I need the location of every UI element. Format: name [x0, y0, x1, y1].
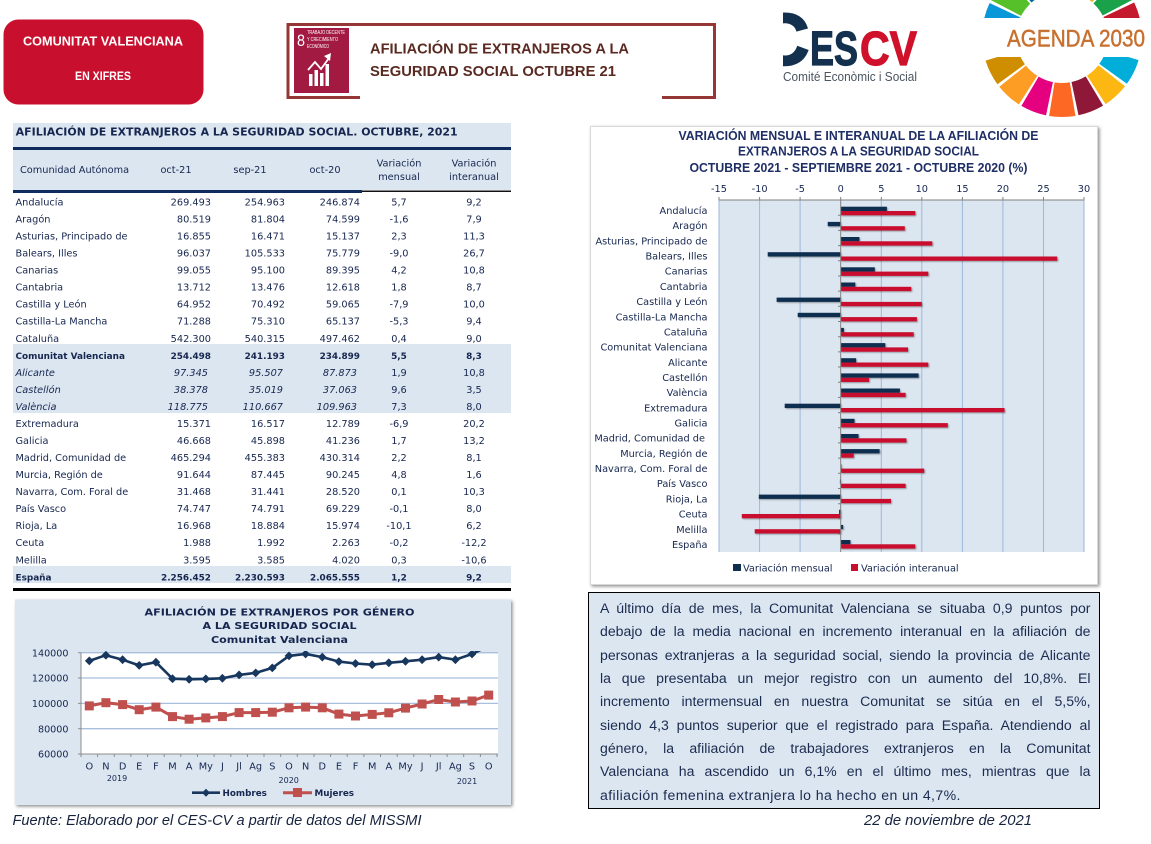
table rows: -7,9 — [389, 300, 409, 311]
heading — [370, 40, 629, 80]
axis values — [711, 184, 1090, 195]
table rows: 46.668 — [177, 436, 211, 447]
axis values: 0 — [838, 184, 844, 195]
table rows: 31.468 — [177, 487, 211, 498]
category labels: País Vasco — [657, 478, 708, 490]
table rows: 74.791 — [251, 504, 285, 515]
table rows: 2.256.452 — [161, 573, 211, 583]
category labels: Castellón — [662, 372, 708, 384]
table rows: 75.310 — [251, 317, 285, 328]
y axis labels — [32, 648, 68, 761]
table rows: 0,3 — [391, 555, 407, 566]
axis values: -15 — [711, 184, 727, 195]
table rows: Extremadura — [16, 419, 79, 430]
table header: oct-21 — [160, 165, 192, 176]
table rows: -12,2 — [461, 538, 487, 549]
title box — [288, 24, 714, 98]
table rows: 241.193 — [245, 352, 285, 362]
table rows: 1.992 — [257, 538, 285, 549]
table rows: 12.789 — [326, 419, 360, 430]
table rows: 0,4 — [391, 334, 407, 345]
table rows: 69.229 — [326, 504, 360, 515]
table rows: Madrid, Comunidad de — [16, 453, 126, 464]
logo: CES CV: Comité Econòmic i Social — [783, 70, 917, 84]
table header: Variación — [377, 158, 421, 170]
table rows: Canarias — [16, 266, 58, 277]
series: Mujeres — [89, 695, 489, 719]
table rows: -9,0 — [389, 249, 409, 260]
y axis labels: 140000 — [32, 648, 68, 659]
table rows — [14, 196, 487, 583]
table rows: 9,2 — [466, 573, 482, 583]
line chart legend: Hombres — [222, 789, 267, 799]
icon: SDG 8 — [294, 28, 349, 93]
line chart plot — [32, 646, 498, 786]
table rows: Andalucía — [16, 196, 63, 208]
x axis labels: O — [485, 762, 493, 772]
category labels: Galicia — [674, 418, 708, 430]
category labels: Melilla — [676, 525, 708, 536]
x axis labels: F — [153, 762, 159, 772]
logo: Agenda 2030 wheel — [984, 0, 1144, 117]
panel: line chart — [15, 600, 511, 805]
table rows: 13.476 — [251, 283, 285, 294]
bar chart legend: Variación mensual — [743, 562, 833, 574]
x axis labels: J — [420, 762, 424, 772]
category labels: València — [667, 387, 708, 399]
table rows: 8,0 — [466, 402, 482, 413]
table rows: 269.493 — [171, 198, 211, 208]
table rows: -0,2 — [389, 538, 409, 549]
x axis labels: My — [398, 762, 413, 772]
y axis labels: 100000 — [32, 699, 68, 710]
axis values: 5 — [878, 184, 884, 195]
table rows: País Vasco — [16, 503, 66, 515]
logo: CES CV: C — [757, 0, 809, 80]
table rows: 9,6 — [391, 385, 407, 396]
table rows: 9,4 — [466, 317, 482, 328]
table title: AFILIACIÓN DE EXTRANJEROS A LA SEGURIDAD SOCIAL. OCTUBRE, 2021 — [16, 126, 458, 138]
x axis labels: A — [385, 762, 392, 772]
table rows: 16.968 — [177, 521, 211, 532]
x axis labels: E — [136, 762, 142, 772]
table header: oct-20 — [309, 165, 341, 176]
category labels: Asturias, Principado de — [595, 236, 708, 247]
panel: bar chart — [590, 126, 1098, 584]
table rows: Aragón — [16, 214, 50, 226]
text block: commentary: afiliación femenina extranjera lo ha hecho en un 4,7%. — [600, 787, 961, 803]
category labels: Andalucía — [660, 205, 708, 217]
axis values: 15 — [956, 184, 969, 195]
line chart legend — [192, 788, 354, 799]
table rows: 1,6 — [466, 470, 482, 481]
table rows: 110.667 — [243, 402, 284, 413]
table rows: 16.471 — [251, 232, 285, 243]
category labels: Castilla-La Mancha — [616, 312, 708, 323]
bar chart title: EXTRANJEROS A LA SEGURIDAD SOCIAL — [738, 145, 979, 159]
table rows: 1,7 — [391, 436, 407, 447]
table rows: 15.137 — [326, 232, 360, 243]
category labels: Murcia, Región de — [620, 448, 708, 460]
x axis labels: My — [199, 762, 213, 772]
bar chart title — [678, 128, 1038, 175]
table rows: 10,8 — [463, 266, 485, 277]
table rows: 95.100 — [251, 266, 285, 277]
table rows: 74.747 — [177, 504, 211, 515]
table rows: 95.507 — [249, 368, 284, 379]
table rows: 7,9 — [466, 214, 482, 226]
category labels: Navarra, Com. Foral de — [595, 464, 708, 475]
table header: mensual — [378, 172, 420, 183]
table rows: 1.988 — [183, 538, 211, 549]
table rows: 41.236 — [326, 436, 360, 447]
table rows: Asturias, Principado de — [16, 232, 128, 243]
x axis labels: F — [353, 762, 359, 772]
text block: commentary: siendo 4,3 puntos superior que el registrado para España. Atendiendo al — [600, 717, 1090, 733]
axis values: -10 — [752, 184, 768, 195]
table rows: 7,3 — [391, 402, 407, 413]
table header — [20, 158, 499, 183]
x axis labels: E — [336, 762, 342, 772]
table rows: -10,1 — [386, 521, 412, 532]
table header: Comunidad Autónoma — [20, 164, 129, 176]
category labels: Canarias — [665, 267, 708, 278]
category labels: Aragón — [672, 220, 708, 232]
table rows: 45.898 — [251, 436, 285, 447]
table rows: 246.874 — [320, 198, 360, 208]
series: Hombres — [89, 646, 489, 679]
axis values: -5 — [795, 184, 805, 195]
table rows: Castilla-La Mancha — [16, 317, 107, 328]
category labels: Alicante — [668, 358, 708, 369]
bar chart plot — [594, 184, 1090, 552]
logo: CES CV: CV — [860, 23, 917, 76]
category labels: Cataluña — [664, 327, 708, 338]
logo: CES CV: ES — [810, 23, 858, 76]
table rows: 234.899 — [320, 352, 360, 362]
table rows: 497.462 — [320, 334, 360, 345]
heading: AFILIACIÓN DE EXTRANJEROS A LA — [370, 40, 629, 58]
badge: Comunitat Valenciana en xifres: EN XIFRES — [75, 69, 131, 83]
table rows: 8,3 — [466, 352, 482, 362]
table rows: 8,1 — [466, 453, 482, 464]
text block: commentary: género, la afiliación de trabajadores extranjeros en la Comunitat — [600, 740, 1090, 756]
table rows: 35.019 — [249, 385, 283, 396]
badge: Comunitat Valenciana en xifres: COMUNITAT VALENCIANA — [23, 34, 184, 48]
table rows: 4,8 — [391, 470, 407, 481]
table header: Variación — [452, 158, 496, 170]
table rows: Castilla y León — [16, 299, 87, 311]
axis values: 10 — [916, 184, 928, 195]
x axis labels: Jl — [435, 762, 441, 772]
table rows: 0,1 — [391, 487, 407, 498]
table header: interanual — [449, 172, 499, 183]
category labels — [594, 205, 708, 551]
table rows: 455.383 — [245, 453, 285, 464]
table rows: Cataluña — [16, 334, 59, 345]
table rows: 37.063 — [323, 385, 357, 396]
x axis labels: D — [319, 762, 326, 772]
x axis labels: N — [102, 762, 110, 772]
table rows: 465.294 — [171, 453, 211, 464]
table rows: 97.345 — [174, 368, 208, 379]
text block: commentary — [588, 592, 1100, 809]
x axis labels: O — [85, 762, 93, 772]
table rows: 64.952 — [177, 300, 211, 311]
category labels: España — [672, 540, 708, 551]
table rows: -6,9 — [389, 419, 409, 430]
table rows: 28.520 — [326, 487, 360, 498]
category labels: Comunitat Valenciana — [600, 343, 708, 354]
table rows: 87.873 — [323, 368, 357, 379]
table rows: Galicia — [16, 436, 49, 447]
table rows: 74.599 — [326, 214, 360, 226]
table rows: 16.855 — [177, 232, 211, 243]
icon: SDG 8: TRABAJO DECENTE — [307, 30, 346, 36]
x axis labels: 2020 — [279, 776, 299, 785]
table rows: Balears, Illes — [16, 249, 78, 260]
table rows: Alicante — [14, 368, 55, 379]
table rows: 5,7 — [391, 198, 407, 208]
table rows: 254.963 — [245, 198, 285, 208]
table rows: Comunitat Valenciana — [16, 352, 125, 362]
table rows: 105.533 — [245, 249, 285, 260]
x axis labels: Ag — [249, 762, 262, 772]
table rows: València — [16, 401, 56, 413]
table rows: 5,5 — [391, 352, 407, 362]
x axis labels: M — [368, 762, 376, 772]
x axis labels: O — [285, 762, 293, 772]
table rows: 80.519 — [177, 214, 211, 226]
x axis labels: Ag — [449, 762, 462, 772]
table rows: Rioja, La — [16, 521, 57, 532]
table rows: Ceuta — [16, 538, 44, 549]
table rows: 2,3 — [391, 232, 407, 243]
table rows: 91.644 — [177, 470, 211, 481]
table rows: 9,2 — [466, 198, 482, 208]
y axis labels: 120000 — [32, 674, 68, 685]
bars: variación mensual — [759, 207, 919, 544]
table rows: -5,3 — [389, 317, 409, 328]
table rows: 13,2 — [463, 436, 485, 447]
source note: Fuente: Elaborado por el CES-CV a partir de datos del MISSMI — [12, 813, 422, 829]
x axis labels: Jl — [235, 762, 242, 772]
category labels: Cantabria — [660, 282, 708, 293]
category labels: Balears, Illes — [645, 252, 708, 262]
table rows: 15.974 — [326, 521, 360, 532]
x axis labels: 2019 — [107, 774, 127, 783]
x axis labels: D — [119, 762, 126, 772]
table rows: -0,1 — [389, 504, 409, 515]
category labels: Madrid, Comunidad de — [594, 434, 705, 445]
line chart title — [144, 606, 414, 646]
axis values: 30 — [1078, 184, 1090, 195]
table rows: Murcia, Región de — [16, 469, 103, 481]
table rows: 87.445 — [251, 470, 285, 481]
y axis labels: 80000 — [38, 724, 68, 735]
table rows: 70.492 — [251, 300, 285, 311]
table rows: 10,0 — [463, 300, 485, 311]
table rows: Cantabria — [16, 283, 63, 294]
table rows: 430.314 — [320, 453, 360, 464]
table rows: 1,2 — [391, 573, 407, 583]
table rows: 16.517 — [251, 419, 285, 430]
line chart title: AFILIACIÓN DE EXTRANJEROS POR GÉNERO — [144, 606, 414, 618]
bar chart legend — [733, 562, 959, 574]
table rows: Navarra, Com. Foral de — [16, 487, 128, 498]
table rows: 1,8 — [391, 283, 407, 294]
table rows: 3.595 — [183, 555, 211, 566]
table rows: 3.585 — [257, 555, 285, 566]
icon: SDG 8: ECONÓMICO — [307, 43, 329, 50]
table rows: 12.618 — [326, 283, 360, 294]
text block: commentary: la que presentaba un mejor registro con un aumento del 10,8%. El — [600, 670, 1090, 686]
bar chart legend: Variación interanual — [861, 562, 959, 574]
table rows: 4.020 — [332, 555, 360, 566]
x axis labels: 2021 — [457, 777, 477, 786]
x axis labels: S — [269, 762, 275, 772]
text block: commentary: Valenciana ha ascendido un 6,1% en el último mes, mientras que la — [600, 763, 1090, 779]
line chart title: Comunitat Valenciana — [211, 635, 348, 646]
table rows: 26,7 — [463, 249, 485, 260]
table rows: 81.804 — [251, 214, 285, 226]
table rows: 99.055 — [177, 266, 211, 277]
table rows: 65.137 — [326, 317, 360, 328]
table rows: 38.378 — [174, 385, 208, 396]
table rows: 96.037 — [177, 249, 211, 260]
icon: SDG 8: 8 — [297, 31, 305, 50]
bar chart title: OCTUBRE 2021 - SEPTIEMBRE 2021 - OCTUBRE 2020 (%) — [690, 161, 1028, 175]
table rows: 75.779 — [326, 249, 360, 260]
y axis labels: 60000 — [38, 750, 68, 761]
table rows: 90.245 — [326, 470, 360, 481]
table rows: 10,3 — [463, 487, 485, 498]
x axis labels: N — [302, 762, 309, 772]
x axis labels: A — [186, 762, 193, 772]
table rows: 2.263 — [332, 538, 360, 549]
table rows: 13.712 — [177, 283, 211, 294]
table rows: 10,8 — [463, 368, 485, 379]
x axis labels — [85, 762, 493, 786]
table rows: -10,6 — [461, 555, 487, 566]
table rows: 8,7 — [466, 283, 482, 294]
table rows: 4,2 — [391, 266, 407, 277]
category labels: Castilla y León — [636, 296, 708, 308]
table rows: 1,9 — [391, 368, 407, 379]
table rows: 2,2 — [391, 453, 407, 464]
table rows: 542.300 — [171, 334, 211, 345]
line chart legend: Mujeres — [314, 789, 354, 799]
table rows: 59.065 — [326, 300, 360, 311]
table rows: España — [16, 573, 52, 583]
table rows: 9,0 — [466, 334, 482, 345]
table rows: 8,0 — [466, 504, 482, 515]
table rows: 254.498 — [171, 352, 211, 362]
panel: data table — [13, 123, 511, 591]
table rows: 118.775 — [168, 402, 208, 413]
bar chart title: VARIACIÓN MENSUAL E INTERANUAL DE LA AFILIACIÓN DE — [678, 128, 1038, 143]
table rows: 2.230.593 — [235, 573, 285, 583]
heading: SEGURIDAD SOCIAL OCTUBRE 21 — [370, 63, 616, 80]
text block: commentary: incremento intermensual en nuestra Comunitat se sitúa en el 5,5%, — [600, 693, 1090, 709]
category labels: Rioja, La — [666, 494, 708, 505]
category labels: Ceuta — [679, 510, 708, 521]
table rows: Melilla — [16, 555, 47, 566]
table rows: Castellón — [16, 384, 61, 396]
table rows: 6,2 — [466, 521, 482, 532]
axis values: 25 — [1037, 184, 1050, 195]
table rows: 2.065.555 — [310, 573, 360, 583]
text block: commentary: personas extranjeras a la seguridad social, siendo la provincia de Alicante — [600, 647, 1090, 663]
logo: CES CV — [783, 12, 918, 81]
table rows: 11,3 — [463, 232, 485, 243]
table rows: 3,5 — [466, 385, 482, 396]
table rows: 20,2 — [463, 419, 485, 430]
table rows: 15.371 — [177, 419, 211, 430]
table rows: 71.288 — [177, 317, 211, 328]
text block: commentary: debajo de la media nacional en incremento interanual en la afiliación de — [600, 623, 1090, 639]
table rows: 18.884 — [251, 521, 285, 532]
x axis labels: M — [168, 762, 177, 772]
table rows: 89.395 — [326, 266, 360, 277]
table rows: -1,6 — [389, 214, 409, 226]
category labels: Extremadura — [644, 403, 708, 414]
table rows: 109.963 — [317, 402, 357, 413]
line chart title: A LA SEGURIDAD SOCIAL — [202, 621, 357, 632]
text block: commentary: A último día de mes, la Comunitat Valenciana se situaba 0,9 puntos por — [600, 600, 1090, 616]
table header: sep-21 — [233, 165, 267, 176]
axis values: 20 — [997, 184, 1009, 195]
icon: SDG 8: Y CRECIMIENTO — [307, 37, 338, 43]
table rows: 31.441 — [251, 487, 285, 498]
date: 22 de noviembre de 2021 — [863, 813, 1032, 829]
bars: variación interanual — [742, 211, 1057, 549]
x axis labels: S — [469, 762, 475, 772]
badge: Comunitat Valenciana en xifres — [4, 20, 204, 104]
table rows: 540.315 — [245, 334, 285, 345]
x axis labels: J — [220, 762, 224, 772]
